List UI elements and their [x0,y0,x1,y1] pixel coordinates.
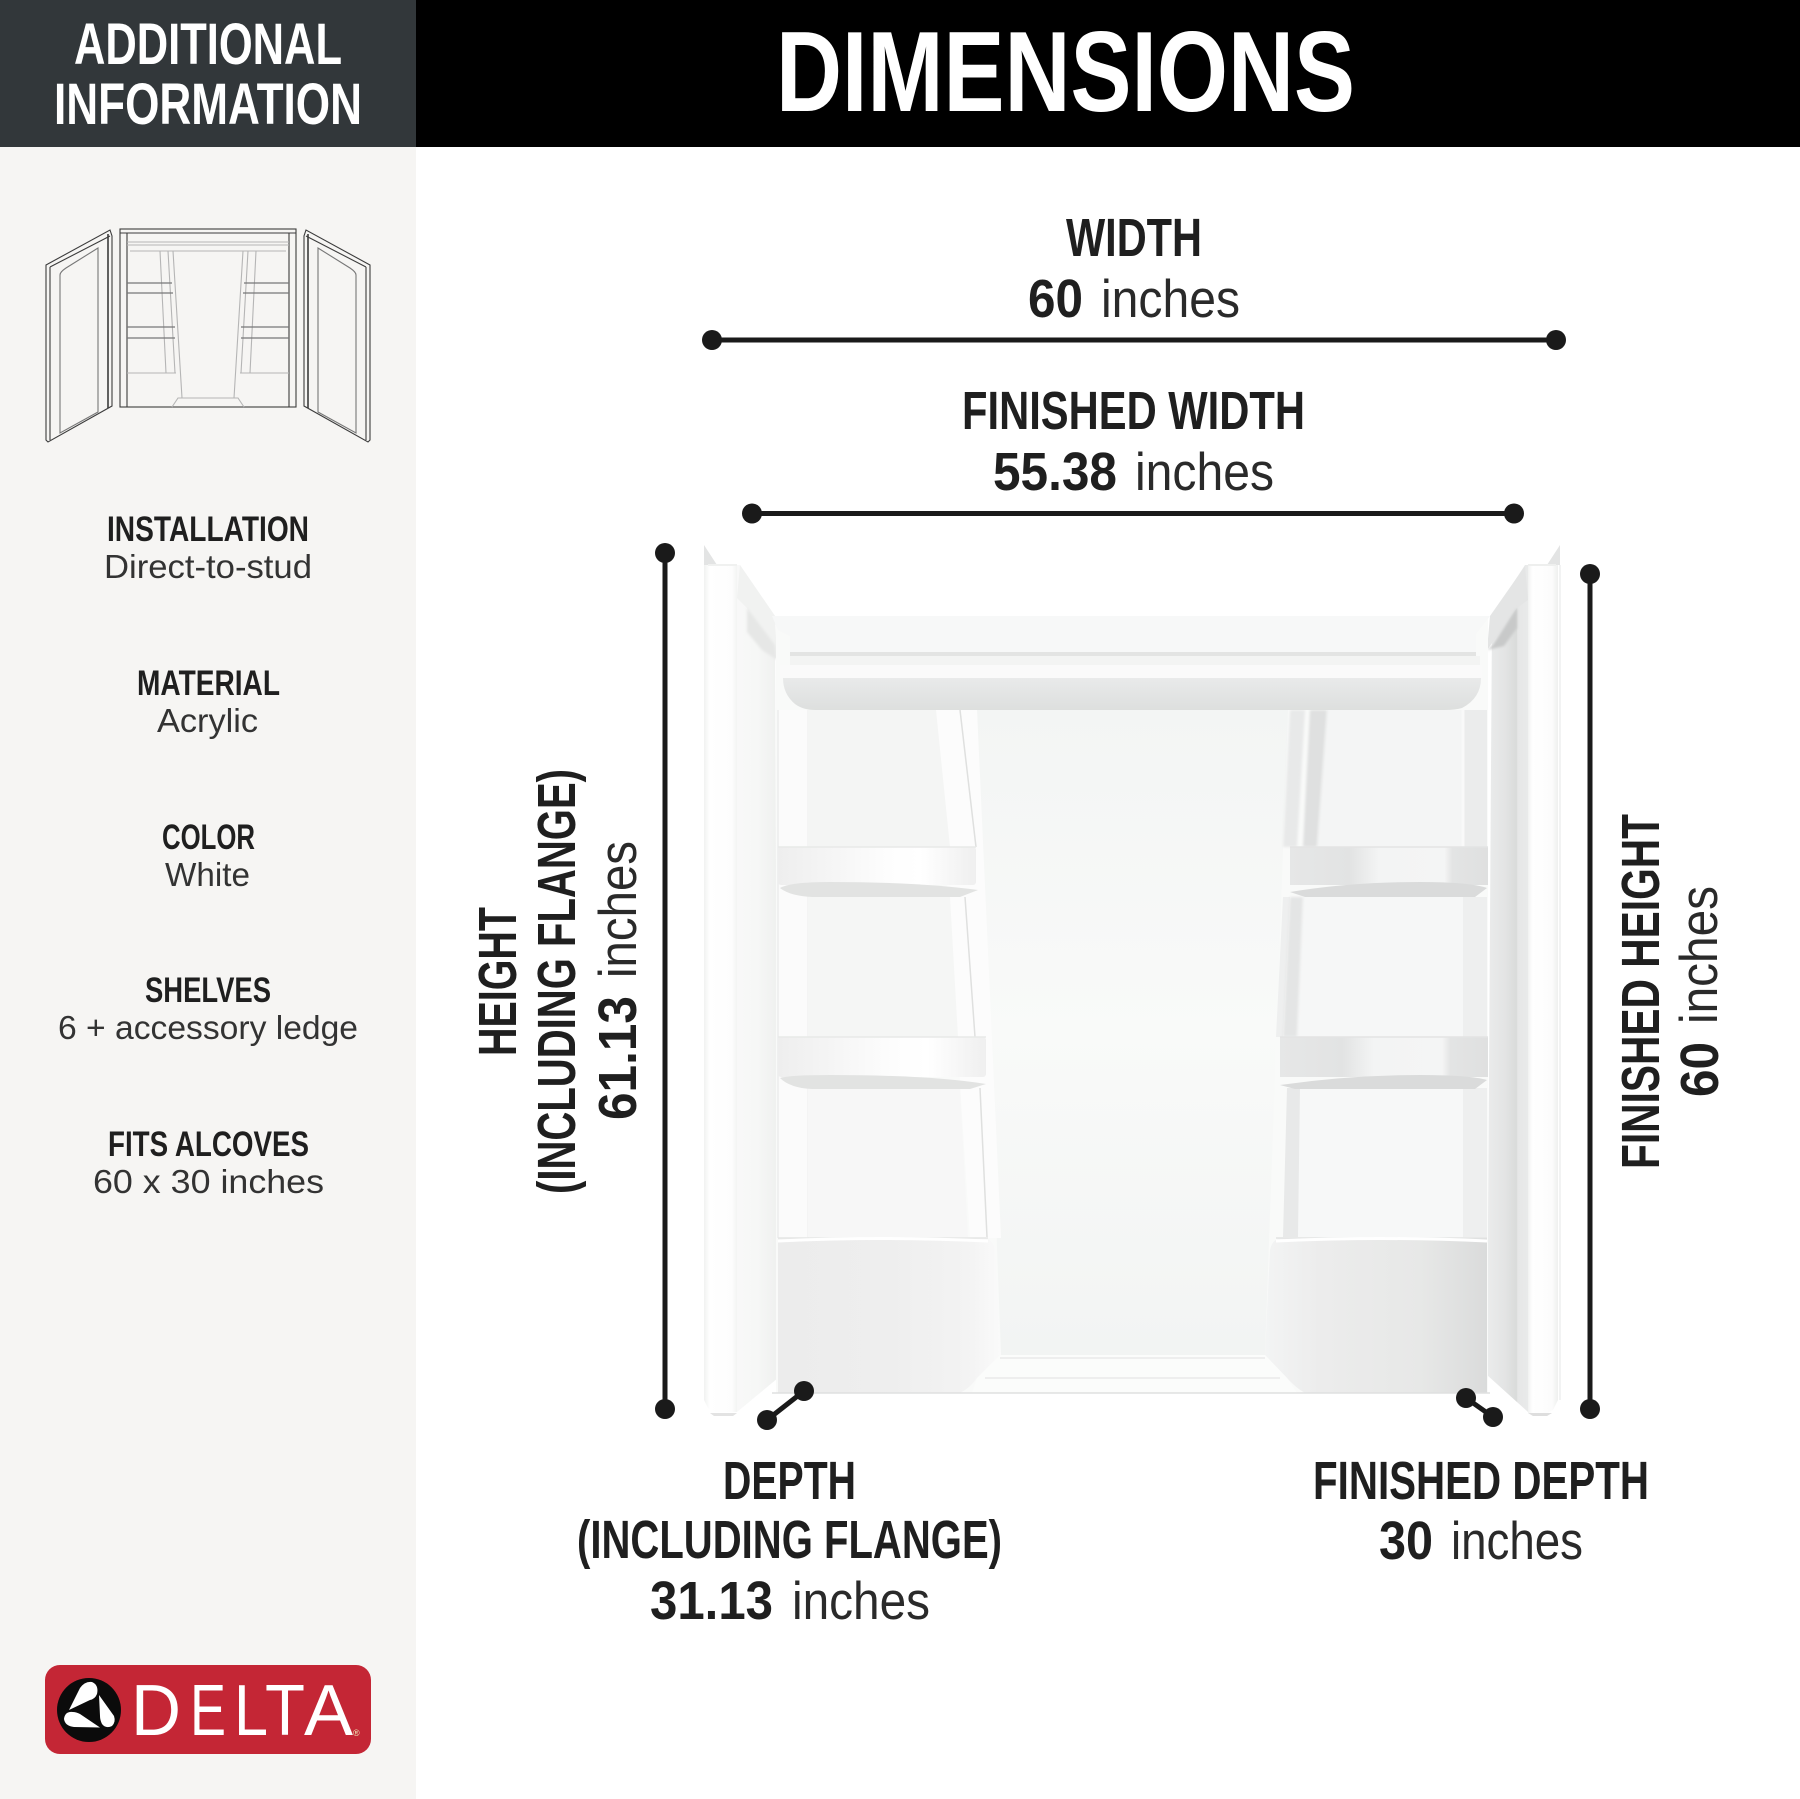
panel: sidebar additional information [0,0,416,1799]
dimension: width [702,208,1566,350]
dimension: height including flange: 61.13 [588,996,648,1120]
left corner seat [778,1238,1001,1393]
right shelf upper [1290,847,1488,897]
top header band [772,616,1490,678]
dimension: finished width: 55.38 [993,442,1117,502]
dimension: depth including flange: (INCLUDING FLANGE) [577,1510,1002,1570]
sidebar header: INFORMATION [54,72,362,137]
arrow: finished height line [1580,564,1600,1419]
right door [304,230,370,442]
spec: installation: INSTALLATION [107,510,309,549]
arrow: finished width line [742,504,1524,524]
sidebar header [0,0,416,147]
arrow: height line [655,543,675,1419]
spec: shelves: 6 + accessory ledge [58,1009,358,1046]
left upper recess [808,710,950,847]
spec: material [137,664,280,739]
spec: fits alcoves: 60 x 30 inches [93,1163,324,1200]
arrow: finished depth connector [1456,1388,1503,1427]
left shelf upper [778,847,978,897]
right flange [1528,565,1560,1416]
dimension: finished depth: inches [1451,1512,1583,1571]
right corner seat [1265,1238,1487,1393]
dimension: finished height [1580,564,1730,1419]
dimension: depth including flange: 31.13 [650,1571,773,1631]
spec: fits alcoves: FITS ALCOVES [108,1125,309,1164]
dimension: depth including flange: inches [792,1572,930,1631]
base trim [772,1355,1490,1393]
dimension: height including flange [468,543,675,1419]
dimension: finished depth: FINISHED DEPTH [1313,1451,1649,1511]
dimension: width: WIDTH [1066,208,1202,268]
dimension: finished depth [1313,1388,1649,1571]
sidebar header: ADDITIONAL [74,12,342,77]
left door [46,230,112,442]
logo: Delta: T [265,1671,305,1751]
dimension: depth including flange [577,1381,1002,1631]
flange spikes [704,545,1560,565]
right middle recess [1297,897,1463,1037]
dimension: width: inches [1101,270,1240,329]
spec: color: White [165,856,250,893]
left middle recess [808,897,958,1037]
logo: Delta: L [234,1671,268,1751]
dimension: finished width: inches [1135,443,1274,502]
spec: color: COLOR [162,818,255,857]
dimension: finished height: inches [1670,886,1729,1024]
spec: shelves [58,971,358,1046]
dimension: width: 60 [1028,269,1083,329]
main title bar: DIMENSIONS [776,9,1355,136]
spec: fits alcoves [93,1125,324,1200]
centre panel [977,710,1288,1355]
icon: unfolded wall panel line drawing [46,229,370,442]
arrow: width line [702,330,1566,350]
dimension: finished depth: 30 [1379,1511,1433,1571]
logo: Delta: A [304,1671,353,1751]
dimension: height including flange: inches [589,841,648,978]
arrow: depth connector [757,1381,814,1430]
spec: shelves: SHELVES [145,971,271,1010]
dimension: height including flange: HEIGHT [468,907,528,1056]
left shelf lower [778,1037,986,1089]
left lower recess [808,1088,968,1237]
left stile highlights [778,710,1001,1238]
logo: Delta [45,1665,371,1754]
right shelf lower [1280,1037,1488,1089]
logo: Delta: E [190,1671,226,1751]
spec: material: Acrylic [157,702,258,739]
dimension: finished width [742,381,1524,524]
dimension: finished width: FINISHED WIDTH [962,381,1305,441]
dimension: height including flange: (INCLUDING FLANGE) [527,769,587,1194]
spec: material: MATERIAL [137,664,280,703]
dimension: finished height: FINISHED HEIGHT [1611,814,1671,1169]
back wall [776,616,1488,1393]
dimension: depth including flange: DEPTH [723,1451,856,1511]
dimension: finished height: 60 [1670,1042,1730,1097]
spec: installation: Direct-to-stud [104,548,312,585]
right lower recess [1298,1088,1463,1237]
spec: installation [104,510,312,585]
shower wall product illustration [704,545,1560,1416]
left side wall [737,565,778,1412]
right side wall [1487,565,1528,1412]
main title bar [416,0,1800,147]
spec: color [162,818,255,893]
left flange [704,565,737,1416]
accessory ledge [783,678,1481,710]
logo: Delta: D [131,1671,181,1751]
right upper recess [1317,710,1463,847]
logo: Delta: ® [353,1728,360,1738]
